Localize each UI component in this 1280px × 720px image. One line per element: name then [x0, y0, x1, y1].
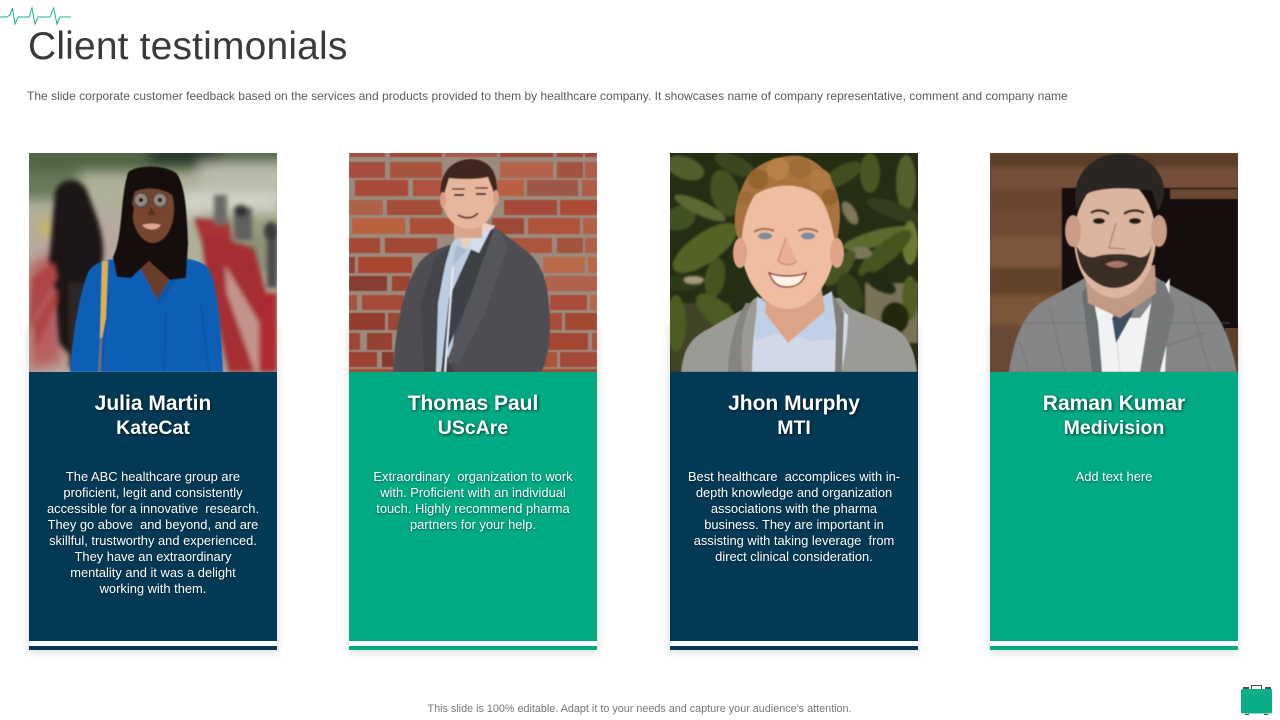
- name and company: Thomas Paul: [408, 392, 538, 415]
- comment: [47, 469, 259, 597]
- icon: heartbeat line: [0, 6, 71, 26]
- name and company: Medivision: [1064, 416, 1164, 438]
- photo: Raman Kumar portrait: [990, 153, 1238, 372]
- comment: They have an extraordinary: [75, 549, 231, 564]
- name and company: MTI: [777, 416, 811, 438]
- comment: touch. Highly recommend pharma: [376, 501, 570, 516]
- name and company: [728, 392, 862, 438]
- name and company: UScAre: [438, 416, 508, 438]
- panel: Raman Kumar testimonial card: [986, 153, 1242, 656]
- name and company: [95, 392, 212, 438]
- panel: Thomas Paul testimonial card: [346, 153, 600, 656]
- text block: Jhon Murphy testimonial: [670, 372, 918, 641]
- comment: assisting with taking leverage from: [694, 533, 894, 548]
- comment: mentality and it was a delight: [70, 565, 236, 580]
- name and company: Jhon Murphy: [728, 392, 860, 415]
- comment: partners for your help.: [410, 517, 536, 532]
- comment: proficient, legit and consistently: [63, 485, 243, 500]
- comment: They go above and beyond, and are: [48, 517, 258, 532]
- comment: working with them.: [100, 581, 206, 596]
- photo: Jhon Murphy portrait: [670, 153, 918, 372]
- footer note: This slide is 100% editable. Adapt it to your needs and capture your audience's attention.: [427, 703, 852, 715]
- name and company: KateCat: [116, 416, 190, 438]
- comment: Best healthcare accomplices with in-: [688, 469, 900, 484]
- name and company: [1043, 392, 1188, 438]
- comment: [373, 469, 573, 534]
- comment: The ABC healthcare group are: [66, 469, 240, 484]
- comment: skillful, trustworthy and experienced.: [49, 533, 257, 548]
- comment: with. Proficient with an individual: [380, 485, 566, 500]
- comment: associations with the pharma: [711, 501, 877, 516]
- comment: direct clinical consideration.: [715, 549, 873, 564]
- comment: depth knowledge and organization: [696, 485, 892, 500]
- panel: Jhon Murphy testimonial card: [666, 153, 922, 656]
- photo: Thomas Paul portrait: [349, 153, 597, 372]
- text block: Raman Kumar testimonial: [990, 372, 1238, 641]
- name and company: [407, 392, 540, 438]
- title: Client testimonials: [28, 25, 348, 68]
- comment: [688, 469, 900, 564]
- comment: business. They are important in: [704, 517, 884, 532]
- comment: Extraordinary organization to work: [373, 469, 573, 484]
- icon: briefcase: [1241, 685, 1272, 715]
- text block: Thomas Paul testimonial: [349, 372, 597, 641]
- text block: Julia Martin testimonial: [29, 372, 277, 641]
- comment: Add text here: [1076, 469, 1152, 484]
- name and company: Julia Martin: [95, 392, 211, 415]
- panel: Julia Martin testimonial card: [26, 153, 280, 656]
- comment: accessible for a innovative research.: [47, 501, 259, 516]
- photo: Julia Martin portrait: [29, 153, 277, 372]
- subtitle text: The slide corporate customer feedback based on the services and products provided to them by healthcare company. It showcases name of company representative, comment and company name: [27, 89, 1068, 103]
- name and company: Raman Kumar: [1043, 392, 1185, 415]
